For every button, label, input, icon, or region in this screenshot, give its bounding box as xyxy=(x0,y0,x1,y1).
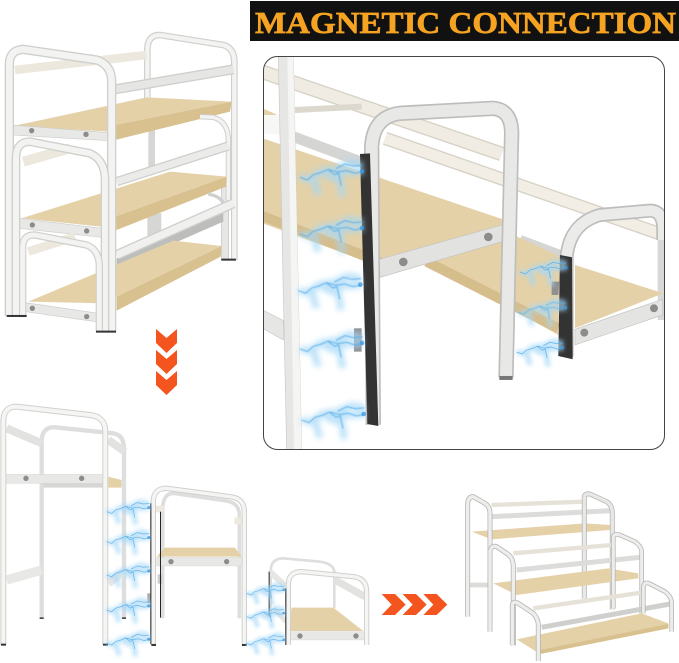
main arch frame xyxy=(372,108,513,425)
panel: magnetic connection close-up xyxy=(262,56,664,450)
lower tier rail and screws xyxy=(575,299,663,345)
middle tier xyxy=(147,488,247,646)
lightning between middle and low tier xyxy=(247,585,285,655)
assembled staircase rack with right arrows xyxy=(382,494,672,661)
wooden shelves xyxy=(263,108,663,335)
tall post of neighbouring tier xyxy=(278,57,302,450)
back rails xyxy=(262,72,663,320)
second tier rails and shelf xyxy=(18,117,228,237)
tall tier xyxy=(1,407,126,646)
third tier rails and shelf xyxy=(25,194,233,322)
exploded rack: three separated tiers with magnets xyxy=(1,407,367,656)
title banner: MAGNETIC CONNECTION xyxy=(255,5,676,40)
bottom step xyxy=(512,583,672,661)
top step xyxy=(468,494,612,632)
front arches of the three tiers xyxy=(7,49,116,333)
lower left rail xyxy=(263,310,283,340)
small arch frame xyxy=(567,211,663,357)
magnet strip on main arch xyxy=(354,153,378,426)
middle step xyxy=(491,534,642,646)
down chevron arrows xyxy=(156,329,177,395)
metal front rail with screws xyxy=(379,223,510,277)
magnet strip on small arch xyxy=(552,255,573,359)
top tier rails and shelf xyxy=(12,55,233,141)
back arch of top tier xyxy=(147,35,236,261)
low tier xyxy=(269,558,367,645)
right chevron arrows xyxy=(382,594,447,615)
lightning between tall and middle tier xyxy=(107,502,150,656)
magnetic lightning effects xyxy=(298,163,568,439)
stacked rack: three nested tiers xyxy=(7,35,236,333)
